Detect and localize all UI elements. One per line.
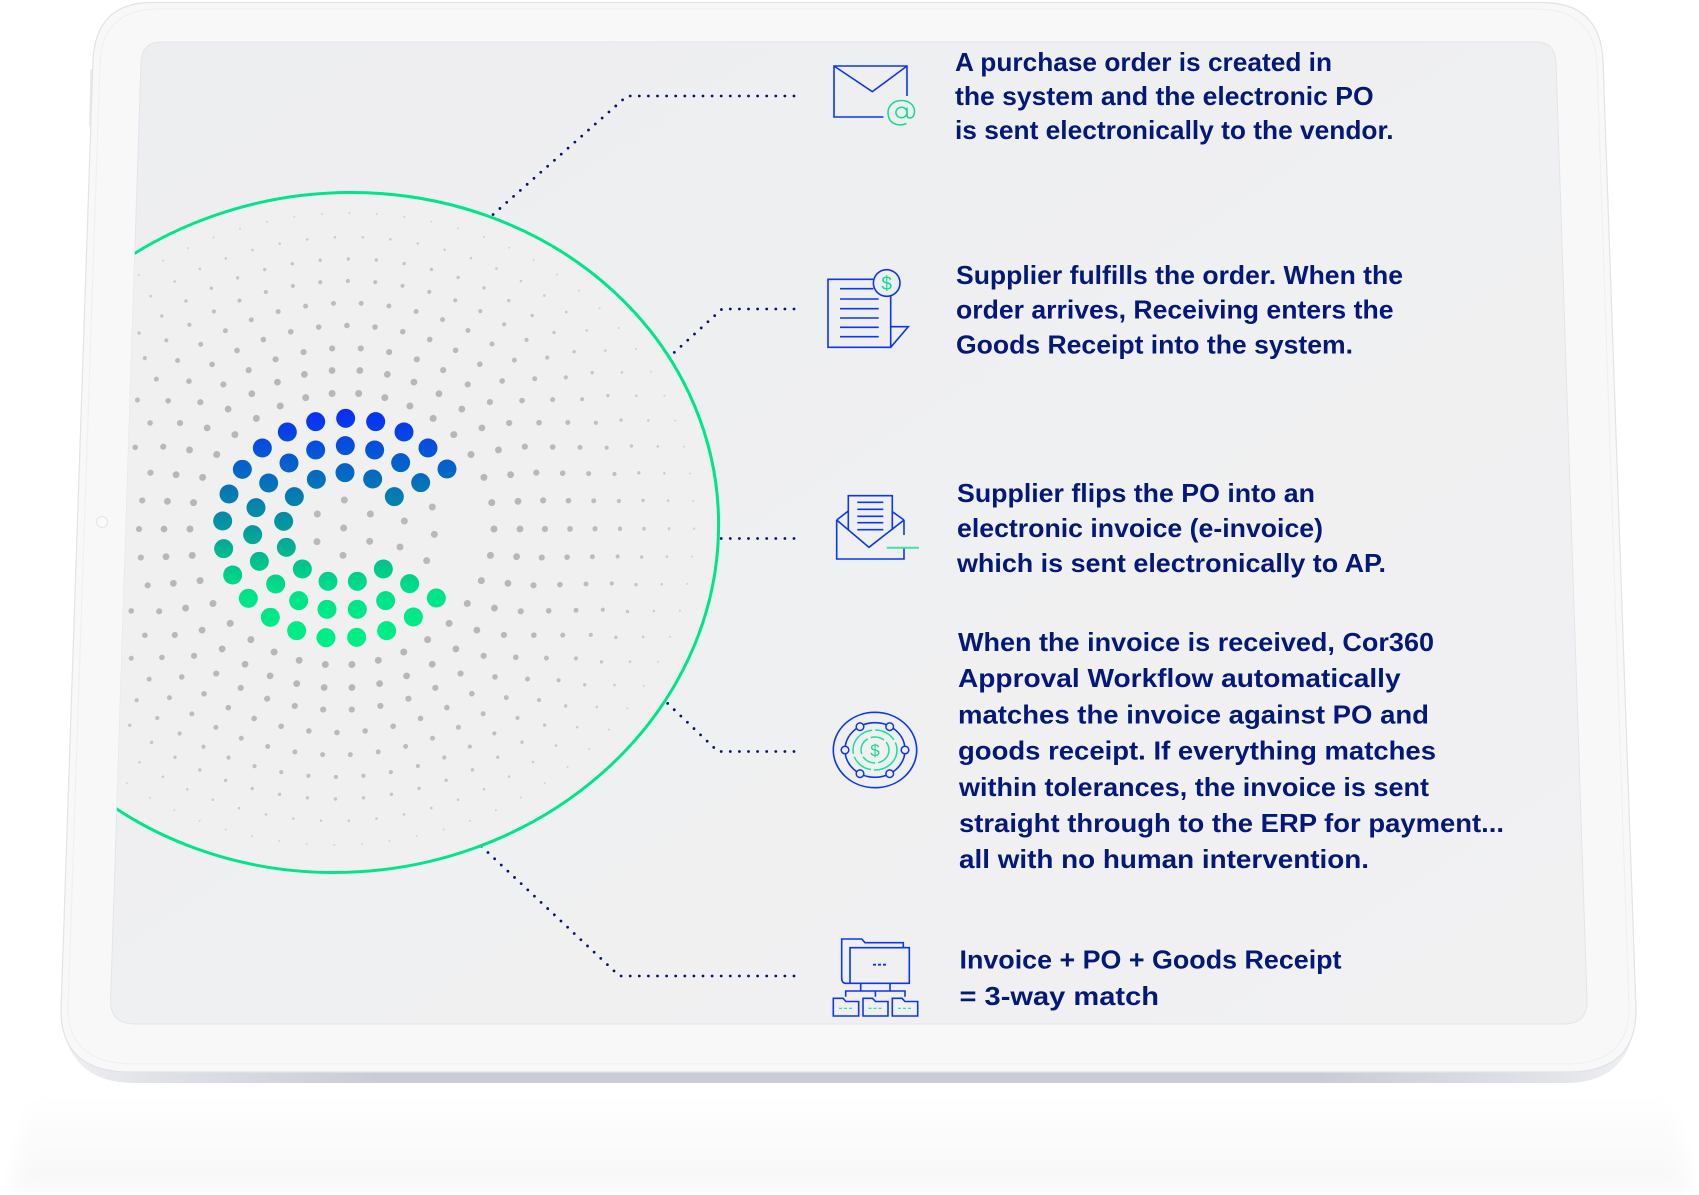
dotted connector 4 — [662, 698, 794, 752]
text block 1: purchase order: is sent electronically to the vendor. — [955, 115, 1394, 145]
dotted connector 2 — [666, 309, 794, 360]
text block 5: 3-way match: = 3-way match — [960, 981, 1159, 1011]
logo dots — [213, 409, 456, 647]
dotted connector 5 — [480, 845, 794, 976]
text block 1: purchase order: A purchase order is created in — [955, 47, 1332, 77]
icon: receipt document: $ — [881, 274, 892, 295]
icon: folder tree — [833, 939, 918, 1016]
text block 4: approval workflow: all with no human intervention. — [959, 844, 1369, 874]
text block 3: e-invoice: Supplier flips the PO into an — [957, 478, 1315, 508]
text block 1: purchase order: the system and the electronic PO — [955, 81, 1374, 111]
text block 5: 3-way match — [960, 944, 1342, 1011]
at sign — [888, 100, 914, 125]
camera — [96, 516, 108, 528]
circle interior — [117, 258, 669, 808]
icon: open envelope with invoice — [837, 496, 919, 559]
text block 4: approval workflow: within tolerances, the invoice is sent — [958, 772, 1429, 802]
text block 4: approval workflow: Approval Workflow automatically — [958, 663, 1401, 693]
coloured dots — [213, 409, 456, 647]
tablet bottom edge — [61, 1010, 1636, 1083]
text block 4: approval workflow: goods receipt. If everything matches — [958, 736, 1436, 766]
icon: approval workflow rings — [833, 712, 917, 788]
text block 5: 3-way match: Invoice + PO + Goods Receipt — [960, 944, 1342, 974]
text block 4: approval workflow — [958, 627, 1504, 874]
icon: email envelope — [834, 66, 914, 125]
text block 3: e-invoice: which is sent electronically to AP. — [956, 548, 1386, 578]
screen — [111, 42, 1587, 1024]
text block 3: e-invoice — [956, 478, 1386, 578]
text block 1: purchase order — [955, 47, 1394, 145]
icon: approval workflow rings: $ — [870, 741, 880, 760]
icon: receipt document — [828, 270, 908, 347]
text block 2: supplier fulfills: Goods Receipt into the system. — [956, 330, 1353, 360]
text block 4: approval workflow: straight through to the ERP for payment... — [959, 808, 1504, 838]
inner grey dots — [313, 496, 438, 564]
grey dot rings — [124, 212, 695, 846]
dotted connector 3 — [716, 537, 794, 540]
tablet shadow — [12, 1092, 1690, 1190]
text block 4: approval workflow: When the invoice is received, Cor360 — [958, 627, 1434, 657]
text block 3: e-invoice: electronic invoice (e-invoice) — [957, 513, 1323, 543]
text block 2: supplier fulfills: order arrives, Receiving enters the — [956, 294, 1394, 324]
circle graphic — [116, 191, 720, 874]
green circle outline — [116, 191, 720, 874]
text block 2: supplier fulfills — [956, 260, 1403, 360]
text block 2: supplier fulfills: Supplier fulfills the order. When the — [956, 260, 1403, 290]
text block 4: approval workflow: matches the invoice against PO and — [958, 700, 1429, 730]
side button — [90, 69, 92, 126]
dotted connector 1 — [488, 96, 794, 219]
